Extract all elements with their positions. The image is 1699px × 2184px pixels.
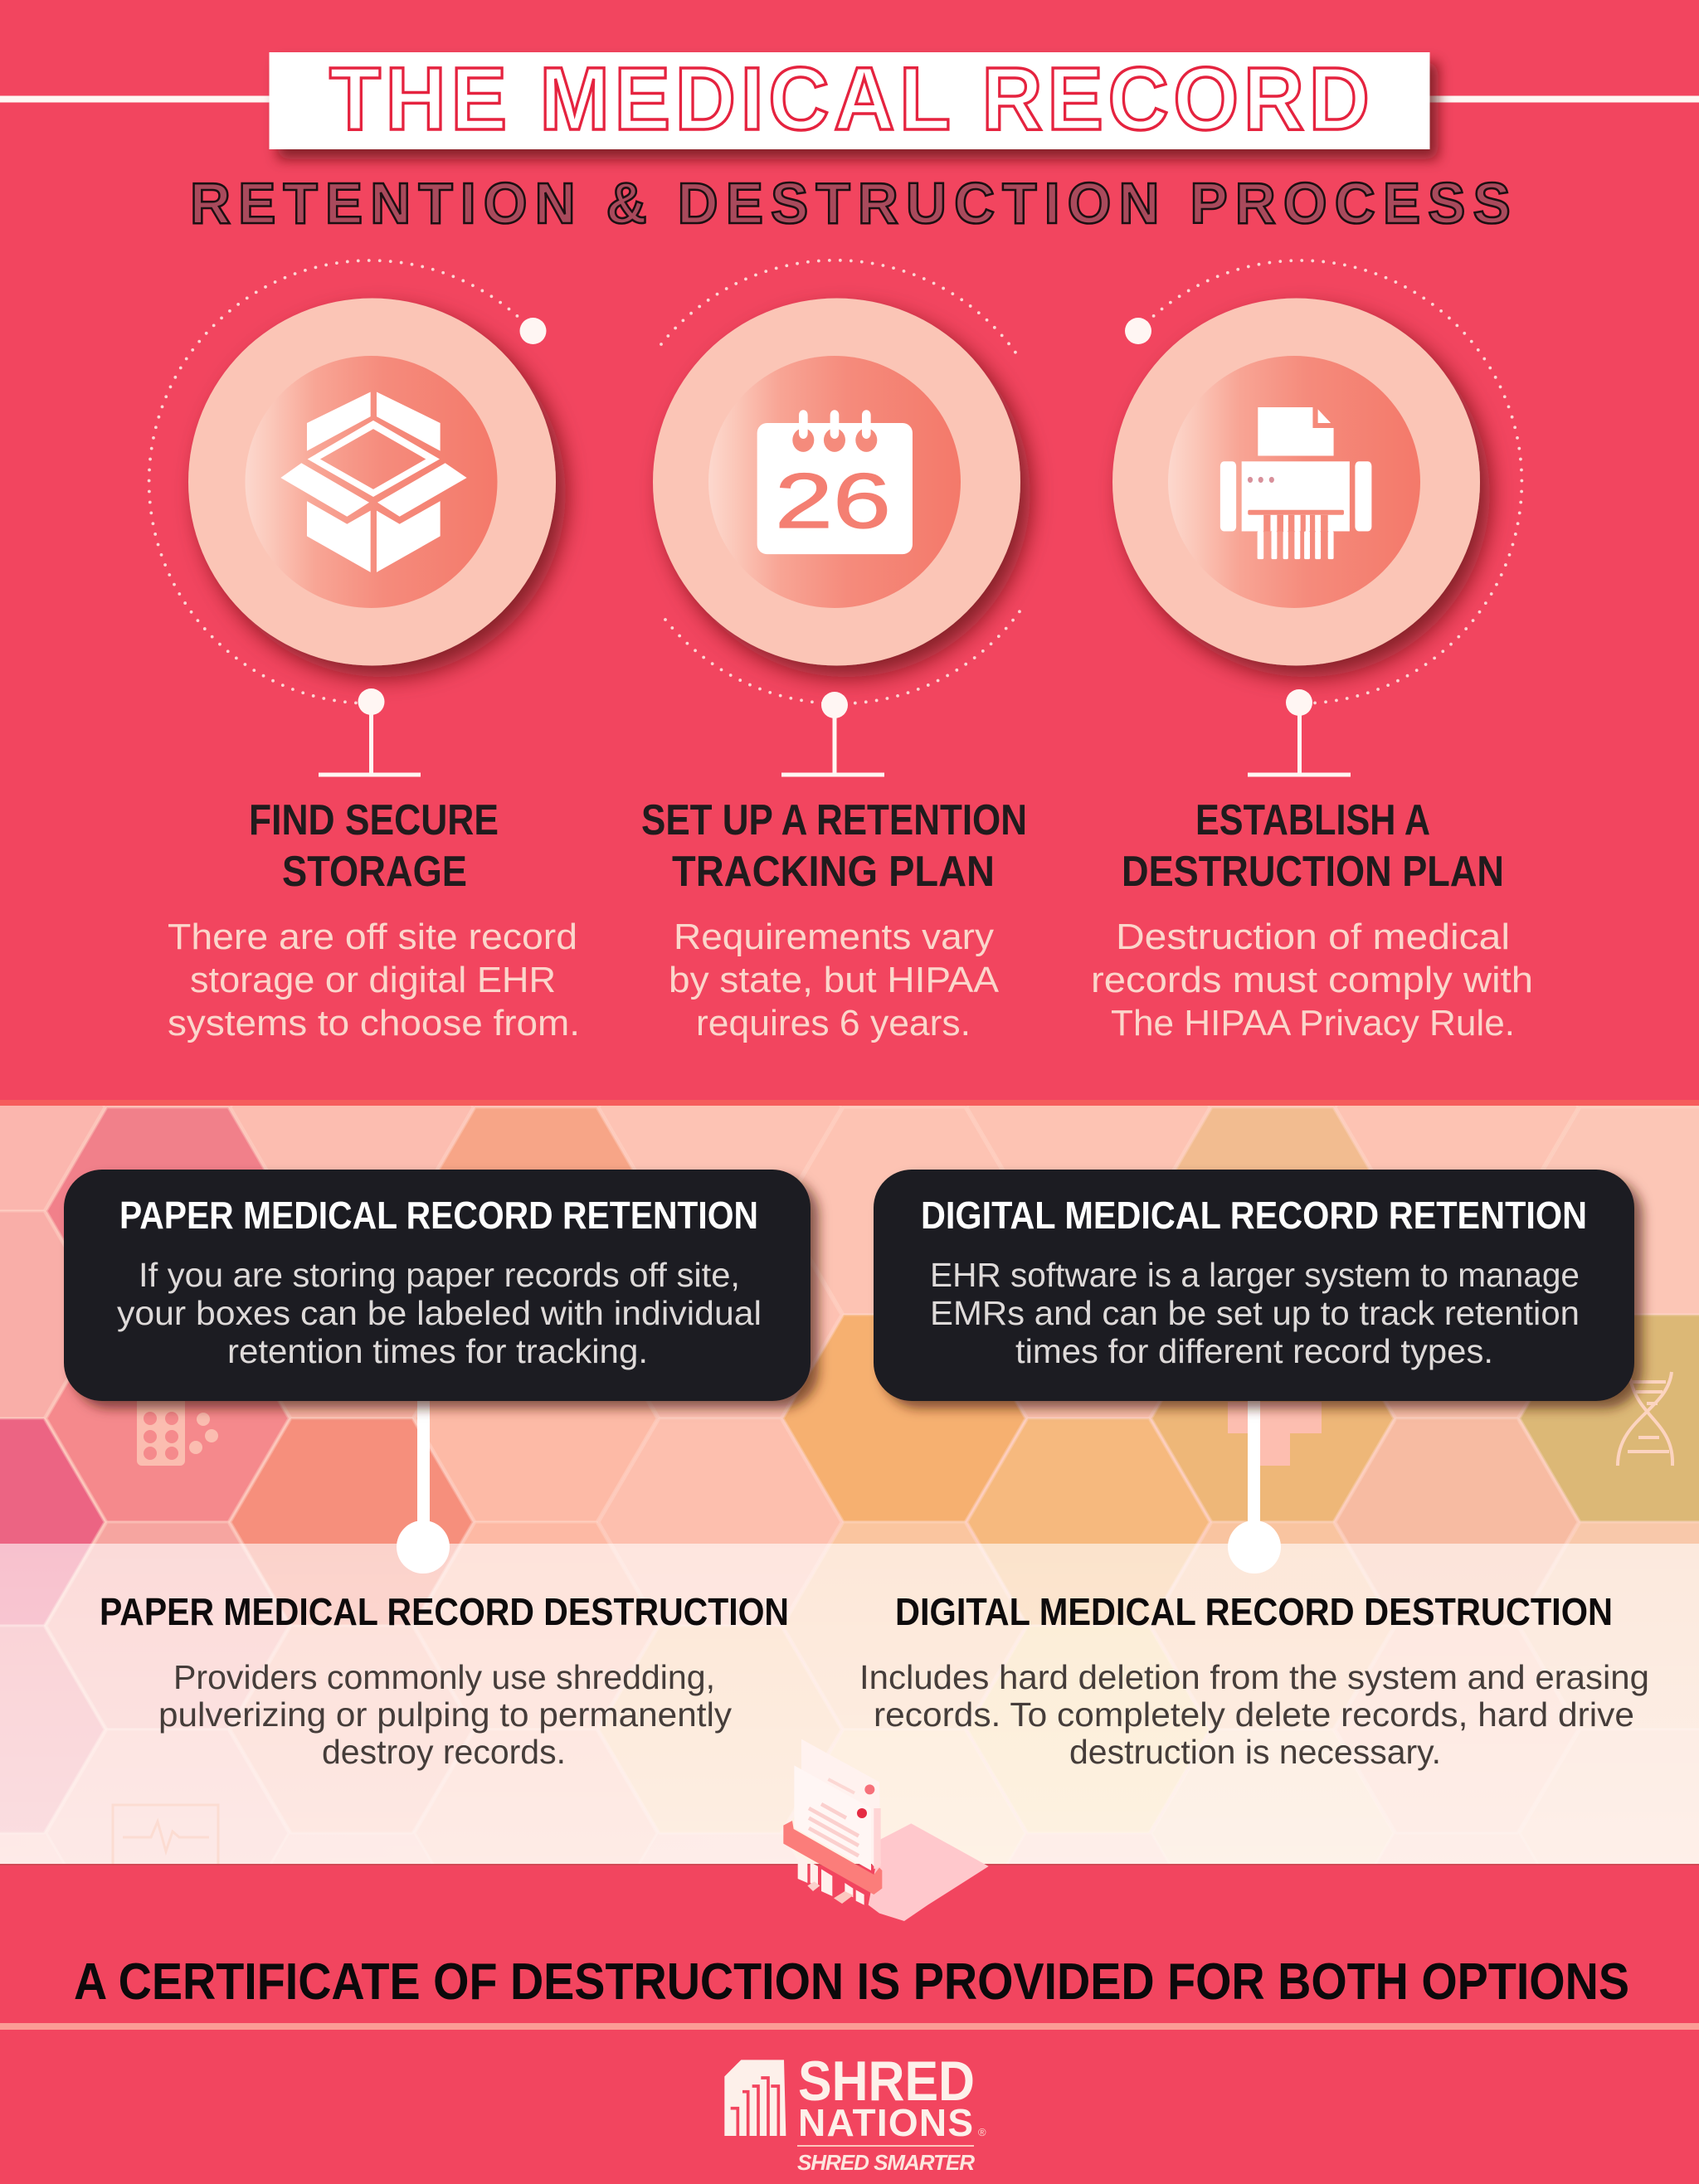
digital retention body: EHR software is a larger system to manage xyxy=(930,1256,1580,1294)
footer rule xyxy=(0,2023,1699,2030)
calendar date: 26 xyxy=(775,457,891,544)
disc 2 xyxy=(653,299,1020,665)
logo divider xyxy=(797,2145,974,2147)
paper destruction body: Providers commonly use shredding, xyxy=(173,1658,715,1696)
digital retention body: EMRs and can be set up to track retention xyxy=(930,1294,1580,1332)
illustration: isometric shredder xyxy=(783,1739,989,1921)
heading 3 xyxy=(1122,796,1504,896)
band edge top xyxy=(0,1100,1699,1106)
dotted ring 1 xyxy=(149,260,533,703)
digital retention body: times for different record types. xyxy=(1015,1332,1493,1370)
body 1: There are off site record xyxy=(168,917,577,957)
paper retention body: retention times for tracking. xyxy=(227,1332,648,1370)
digital retention heading: DIGITAL MEDICAL RECORD RETENTION xyxy=(921,1194,1587,1237)
panel: paper destruction xyxy=(100,1590,789,1771)
icon: pill pack xyxy=(137,1401,218,1466)
icon: calendar xyxy=(757,410,913,554)
body 2: Requirements vary xyxy=(674,917,994,957)
heading 2: TRACKING PLAN xyxy=(672,848,995,896)
step 1: secure storage xyxy=(149,260,580,1043)
paper destruction heading: PAPER MEDICAL RECORD DESTRUCTION xyxy=(100,1590,789,1633)
dotted ring 3 xyxy=(1138,260,1521,703)
title rule xyxy=(0,96,1699,103)
digital destruction body: destruction is necessary. xyxy=(1069,1733,1441,1771)
digital retention body xyxy=(930,1256,1580,1370)
body 1: storage or digital EHR xyxy=(190,960,556,1000)
paper destruction body: destroy records. xyxy=(322,1733,566,1771)
connector: paper retention to destruction xyxy=(397,1394,450,1574)
heading 1 xyxy=(249,796,499,896)
body 1: systems to choose from. xyxy=(168,1003,580,1043)
translucent lower panel xyxy=(0,1544,1699,1865)
heading 2: SET UP A RETENTION xyxy=(641,796,1027,844)
panel: digital destruction xyxy=(859,1590,1649,1771)
icon: open box xyxy=(280,392,467,572)
subtitle: RETENTION & DESTRUCTION PROCESS xyxy=(190,171,1511,236)
disc 1 xyxy=(188,299,556,665)
heading 3: DESTRUCTION PLAN xyxy=(1122,848,1504,896)
paper retention body: your boxes can be labeled with individual xyxy=(117,1294,762,1332)
body 3: Destruction of medical xyxy=(1116,917,1510,957)
logo wordmark: SHRED xyxy=(798,2050,975,2113)
body 3: The HIPAA Privacy Rule. xyxy=(1111,1003,1515,1043)
paper destruction body xyxy=(158,1658,733,1771)
title: THE MEDICAL RECORD xyxy=(329,49,1370,149)
body 2 xyxy=(669,917,1000,1043)
digital destruction heading: DIGITAL MEDICAL RECORD DESTRUCTION xyxy=(895,1590,1613,1633)
heading 1: FIND SECURE xyxy=(249,796,499,844)
heading 2 xyxy=(641,796,1027,896)
band edge bottom xyxy=(0,1864,1699,1865)
logo wordmark second line: NATIONS xyxy=(798,2101,973,2144)
connector pin 3 xyxy=(1125,318,1351,776)
panel: hexagon band xyxy=(0,1106,1699,1864)
digital destruction body: Includes hard deletion from the system and erasing xyxy=(859,1658,1649,1696)
icon: medical cross xyxy=(1228,1402,1322,1466)
paper retention body: If you are storing paper records off site, xyxy=(139,1256,740,1294)
step 2: tracking plan xyxy=(641,260,1027,1043)
digital destruction body xyxy=(859,1658,1649,1771)
icon: heart monitor xyxy=(113,1805,218,1871)
icon: shredder xyxy=(1220,407,1371,559)
body 3 xyxy=(1091,917,1533,1043)
panel: paper retention xyxy=(64,1170,811,1401)
logo tagline: SHRED SMARTER xyxy=(797,2150,975,2175)
body 2: by state, but HIPAA xyxy=(669,960,1000,1000)
body 3: records must comply with xyxy=(1091,960,1533,1000)
paper retention heading: PAPER MEDICAL RECORD RETENTION xyxy=(119,1194,758,1237)
logo: Shred Nations xyxy=(724,2050,986,2175)
body 1 xyxy=(168,917,580,1043)
connector pin 1 xyxy=(319,318,546,776)
digital destruction body: records. To completely delete records, hard drive xyxy=(874,1695,1634,1734)
registered mark: ® xyxy=(978,2126,986,2138)
connector pin 2 xyxy=(781,692,884,776)
heading 1: STORAGE xyxy=(282,848,467,896)
connector: digital retention to destruction xyxy=(1228,1394,1281,1574)
panel: digital retention xyxy=(874,1170,1634,1401)
dotted ring 2 xyxy=(661,260,1022,703)
paper retention body xyxy=(117,1256,762,1370)
paper destruction body: pulverizing or pulping to permanently xyxy=(158,1695,733,1734)
disc 3 xyxy=(1112,299,1480,665)
body 2: requires 6 years. xyxy=(696,1003,971,1043)
step 3: destruction plan xyxy=(1091,260,1533,1043)
icon: dna helix xyxy=(1618,1372,1672,1466)
heading 3: ESTABLISH A xyxy=(1195,796,1430,844)
logo mark xyxy=(724,2060,786,2136)
